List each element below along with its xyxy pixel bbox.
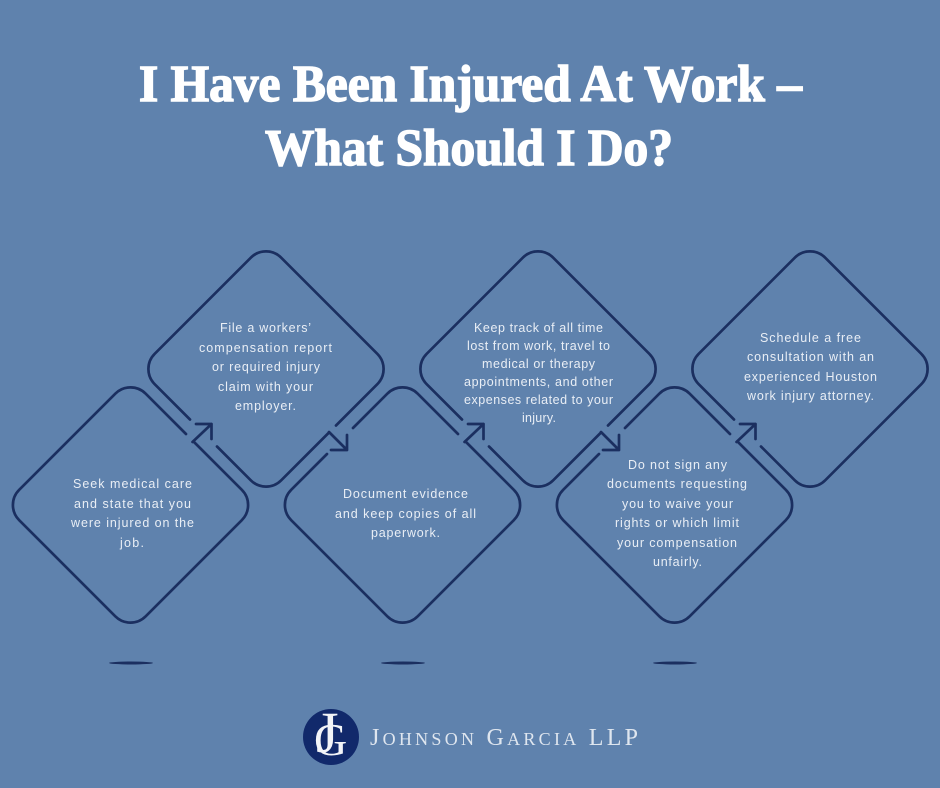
step 5 text [607, 458, 747, 569]
step 5 text: Do not sign any [628, 458, 728, 472]
icon: JG monogram: J [316, 700, 339, 765]
diamond outline step 2 [148, 251, 384, 487]
step 5 text: unfairly. [653, 555, 702, 569]
step 5 text: your compensation [617, 536, 737, 550]
step 1 text [70, 477, 194, 550]
icon: JG monogram [303, 700, 359, 765]
step 4 text: Keep track of all time [474, 321, 603, 335]
title: What Should I Do? [265, 120, 673, 177]
logo wordmark: JOHNSON GARCIA LLP [370, 725, 638, 751]
step 6 text: Schedule a free [760, 331, 861, 345]
step 1 text: Seek medical care [73, 477, 192, 491]
shadow under step 3 [381, 662, 425, 664]
panel: step 4 keep track [420, 251, 656, 487]
step 4 text: medical or therapy [482, 357, 596, 371]
arrow: step 4 to step 5 [601, 432, 619, 450]
step 4 text: appointments, and other [464, 375, 613, 389]
step 1 text: job. [119, 536, 144, 550]
arrow: step 1 to step 2 [192, 424, 212, 442]
step 4 text: injury. [522, 411, 556, 425]
panel: step 6 schedule consultation [692, 251, 928, 487]
diamond outline step 4 [420, 251, 656, 487]
panel: step 5 do not sign [557, 387, 792, 623]
title: I Have Been Injured At Work – [139, 56, 803, 113]
arrow: step 3 to step 4 [464, 424, 484, 442]
step 6 text: consultation with an [747, 350, 874, 364]
step 4 text [464, 321, 613, 425]
step 1 text: and state that you [74, 497, 191, 511]
title [139, 56, 803, 177]
diamond outline step 6 [692, 251, 928, 487]
diamond outline step 1 [13, 387, 248, 623]
arrow: step 5 to step 6 [736, 424, 756, 442]
diamond outline step 3 [285, 387, 520, 623]
step 3 text: and keep copies of all [335, 507, 476, 521]
step 5 text: rights or which limit [615, 516, 740, 530]
step 6 text: experienced Houston [744, 370, 877, 384]
step 5 text: documents requesting [607, 477, 747, 491]
logo: Johnson Garcia LLP [303, 700, 638, 765]
step 4 text: expenses related to your [464, 393, 613, 407]
panel: step 1 seek medical care [13, 387, 248, 623]
step 2 text: compensation report [199, 341, 333, 355]
step 6 text: work injury attorney. [746, 389, 874, 403]
step 4 text: lost from work, travel to [467, 339, 610, 353]
step 2 text: or required injury [212, 360, 321, 374]
step 3 text: Document evidence [343, 487, 468, 501]
step 2 text: employer. [235, 399, 296, 413]
panel: step 2 file report [148, 251, 384, 487]
step 3 text [335, 487, 476, 540]
icon: JG monogram: G [314, 714, 347, 765]
step 1 text: were injured on the [70, 516, 194, 530]
step 6 text [744, 331, 877, 403]
step 2 text: File a workers’ [220, 321, 311, 335]
shadow under step 5 [653, 662, 697, 664]
step 3 text: paperwork. [371, 526, 440, 540]
shadow under step 1 [109, 662, 153, 664]
arrow: step 2 to step 3 [329, 432, 347, 450]
step 2 text: claim with your [218, 380, 313, 394]
step 2 text [199, 321, 333, 413]
panel: step 3 document evidence [285, 387, 520, 623]
diamond outline step 5 [557, 387, 792, 623]
step 5 text: you to waive your [622, 497, 733, 511]
